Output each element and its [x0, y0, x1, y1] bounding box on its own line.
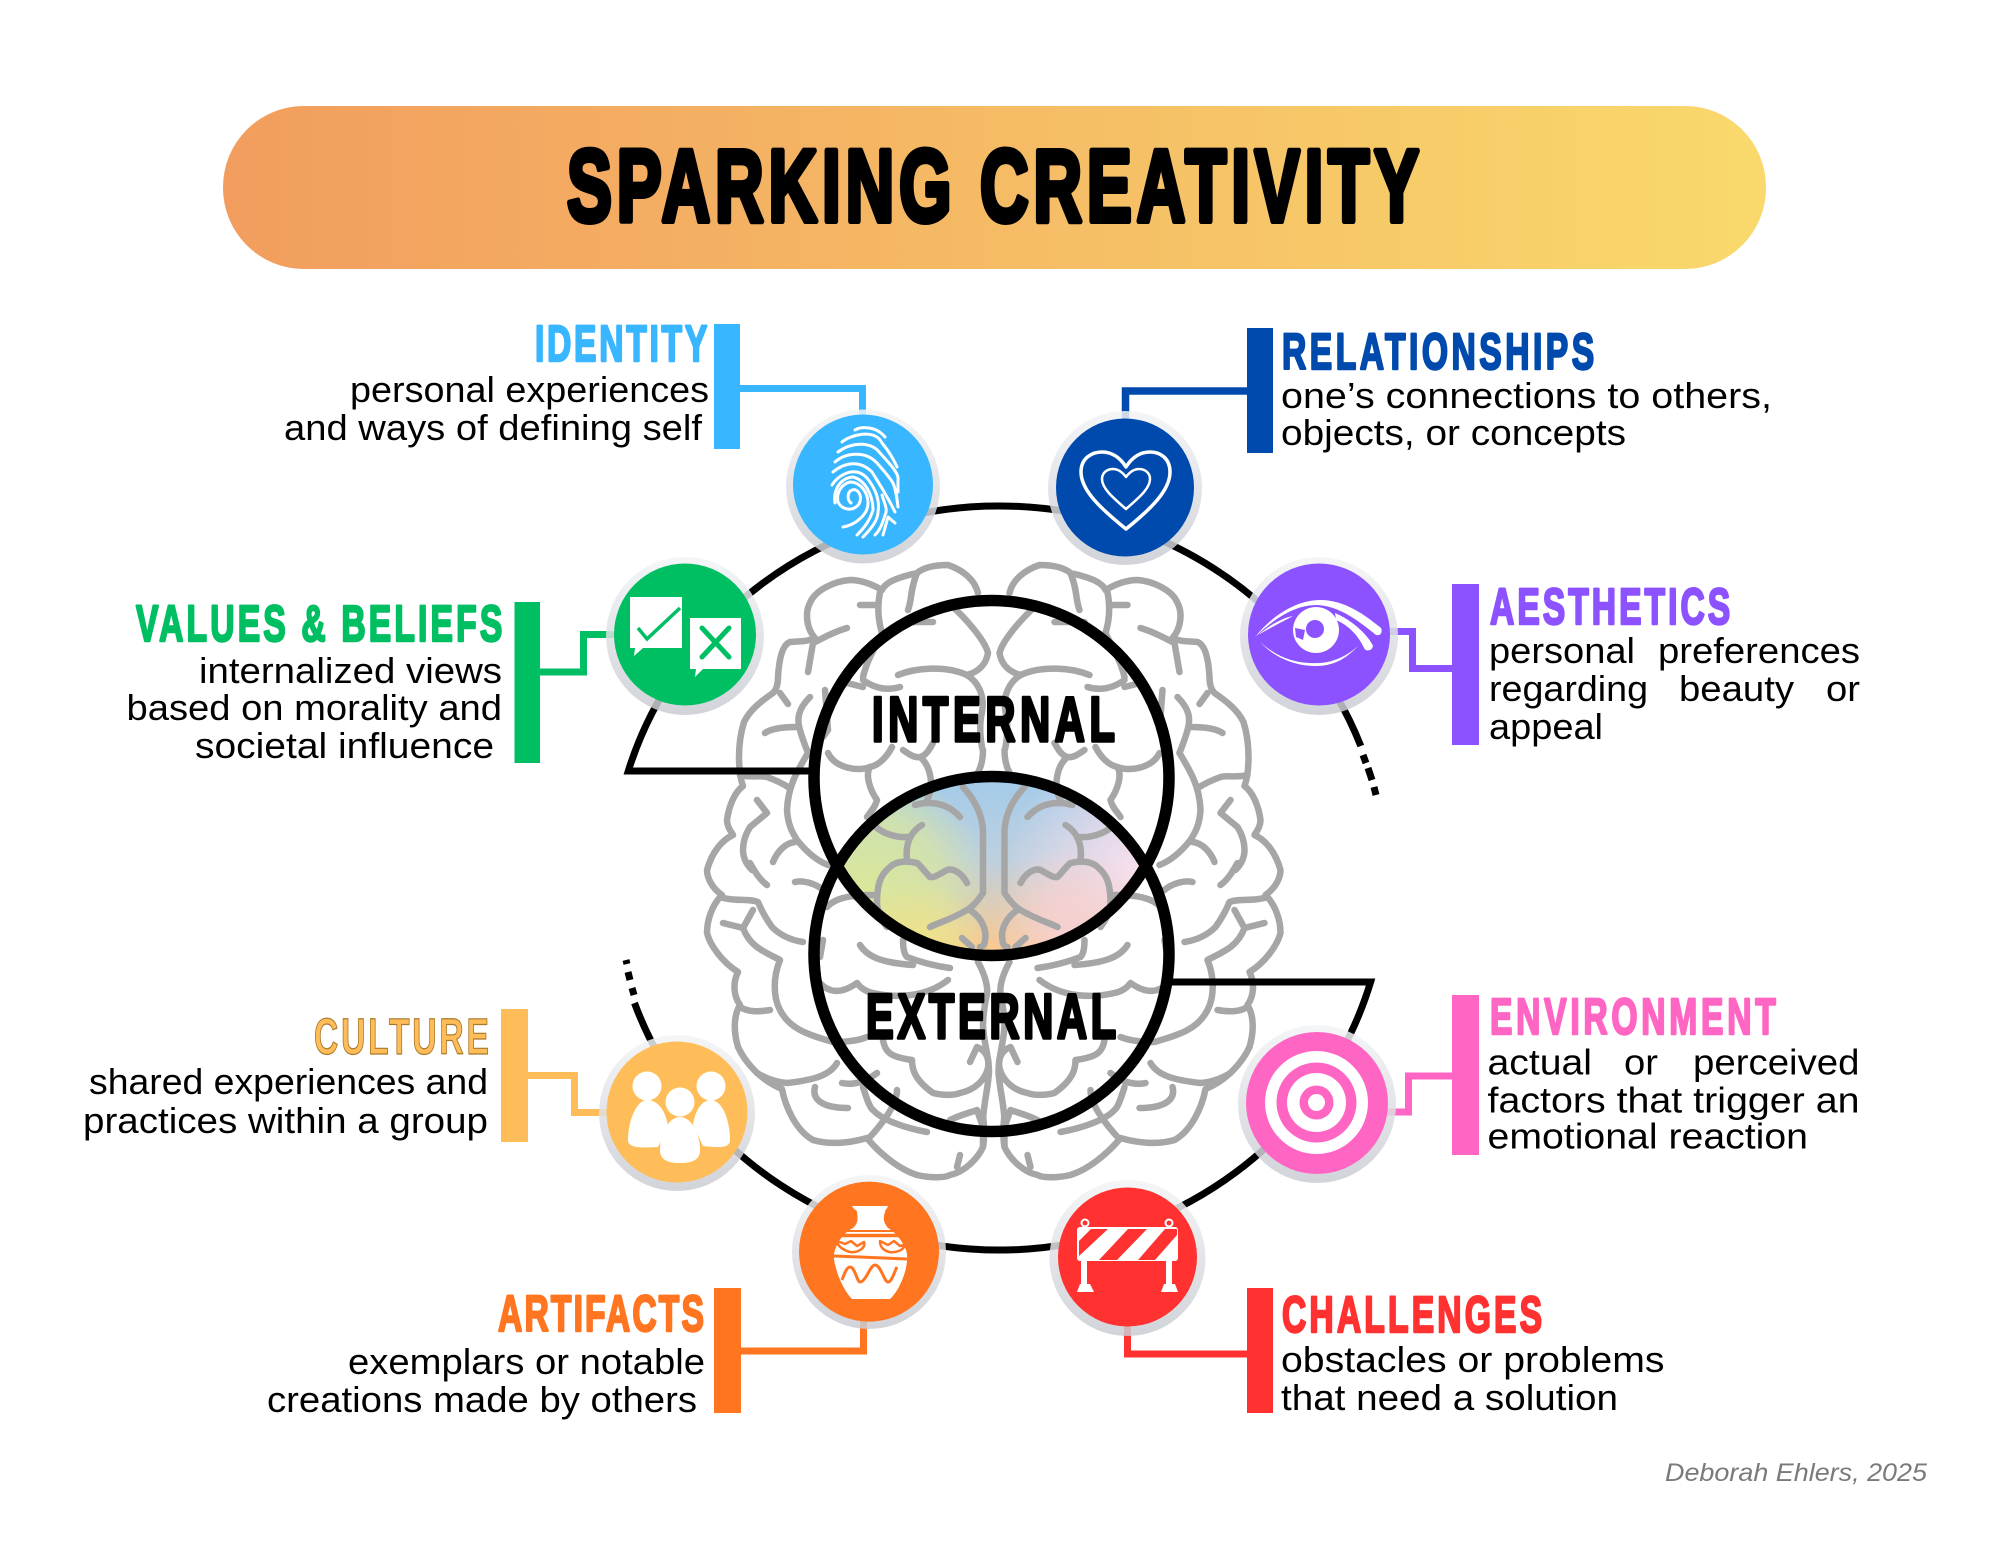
heading: artifacts: ARTIFACTS: [498, 1286, 704, 1343]
gradient lens where the circles overlap: [837, 776, 1146, 956]
icon: group of people: [599, 1035, 755, 1191]
description: environment: factors that trigger an: [1488, 1080, 1860, 1120]
description: aesthetics: personal: [1489, 630, 1635, 671]
description: identity: personal experiences: [350, 369, 709, 410]
description: environment: emotional reaction: [1488, 1116, 1808, 1156]
description: environment: perceived: [1693, 1042, 1860, 1082]
external circle: [814, 776, 1169, 1132]
title banner: [223, 106, 1766, 269]
panel: aesthetics: [1240, 557, 1860, 747]
description: identity: and ways of defining self: [284, 407, 703, 448]
heading: values and beliefs: VALUES & BELIEFS: [136, 596, 502, 653]
icon: check and cross speech bubbles: [606, 557, 764, 715]
description: relationships: [1281, 375, 1772, 453]
panel: artifacts: [267, 1175, 946, 1420]
description: values and beliefs: based on morality and: [126, 687, 502, 728]
description: environment: or: [1624, 1042, 1658, 1082]
description: artifacts: creations made by others: [267, 1379, 697, 1420]
heading: challenges: CHALLENGES: [1282, 1287, 1542, 1344]
heading: environment: ENVIRONMENT: [1490, 989, 1776, 1046]
icon: fingerprint: [786, 410, 940, 564]
icon: road barrier: [1050, 1180, 1206, 1336]
icon: eye: [1240, 557, 1398, 715]
heading: culture: CULTURE: [314, 1009, 489, 1066]
description: aesthetics: or: [1826, 668, 1860, 709]
heading: identity: IDENTITY: [535, 316, 707, 373]
description: aesthetics: appeal: [1489, 706, 1603, 747]
panel: relationships: [1048, 324, 1772, 565]
panel: culture: [83, 1009, 755, 1191]
lower ring arc joined to external circle: [626, 960, 1371, 1250]
description: artifacts: exemplars or notable: [348, 1341, 705, 1382]
icon: vase: [792, 1175, 946, 1329]
description: culture: [83, 1061, 488, 1141]
description: aesthetics: regarding: [1489, 668, 1648, 709]
upper ring arc joined to internal circle: [628, 506, 1376, 795]
description: aesthetics: [1489, 630, 1860, 747]
internal label: INTERNAL: [872, 686, 1115, 755]
description: aesthetics: preferences: [1658, 630, 1860, 671]
internal circle: [814, 600, 1169, 956]
description: values and beliefs: societal influence: [195, 725, 494, 766]
heading: aesthetics: AESTHETICS: [1490, 579, 1730, 636]
description: aesthetics: beauty: [1679, 668, 1794, 709]
panel: challenges: [1050, 1180, 1664, 1418]
title text: SPARKING CREATIVITY: [567, 130, 1419, 243]
description: challenges: [1281, 1339, 1664, 1418]
description: values and beliefs: internalized views: [199, 650, 502, 691]
description: artifacts: [267, 1341, 705, 1420]
icon: target: [1238, 1025, 1396, 1183]
external label: EXTERNAL: [866, 983, 1116, 1052]
description: challenges: obstacles or problems: [1281, 1339, 1664, 1380]
description: culture: practices within a group: [83, 1100, 488, 1141]
description: culture: shared experiences and: [89, 1061, 488, 1102]
credit line: Deborah Ehlers, 2025: [1665, 1459, 1927, 1487]
description: environment: actual: [1488, 1042, 1592, 1082]
description: identity: [284, 369, 709, 448]
heading: relationships: RELATIONSHIPS: [1282, 324, 1594, 381]
description: challenges: that need a solution: [1281, 1377, 1618, 1418]
description: relationships: one’s connections to others,: [1281, 375, 1772, 416]
panel: identity: [284, 316, 940, 564]
brain outline illustration: [707, 565, 1280, 1177]
panel: environment: [1238, 989, 1860, 1183]
description: environment: [1488, 1042, 1860, 1156]
icon: heart: [1048, 411, 1202, 565]
description: relationships: objects, or concepts: [1281, 412, 1626, 453]
panel: values and beliefs: [126, 557, 764, 766]
description: values and beliefs: [126, 650, 502, 766]
